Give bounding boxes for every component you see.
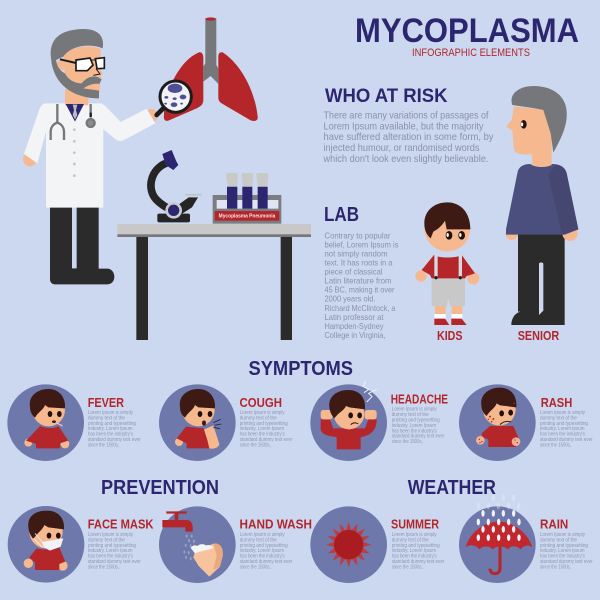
microscope base [157,214,190,222]
table legs [136,237,292,340]
microscope [151,150,202,222]
hair and beard [51,29,103,98]
cough text: industry. Lorem Ipsum [240,426,284,432]
cough heading: COUGH [240,395,282,410]
summer text: dummy text of the [392,537,429,543]
rack label [215,211,279,221]
umbrella canopy [466,522,532,549]
rash text: Lorem Ipsum is simply [540,410,585,416]
doctor [23,29,158,284]
pivot center [168,205,179,216]
hand wash text: standard dummy text ever [240,559,293,565]
panel: face mask [8,506,154,583]
panel: rain [459,494,593,583]
headache hair [329,390,365,418]
fever text: standard dummy text ever [88,437,141,443]
panel: hand wash [159,506,312,583]
rash heading: RASH [541,395,572,410]
text block: lab: Richard McClintock, a [324,303,396,313]
headache eyes [348,412,362,418]
summer text: Lorem Ipsum is simply [392,532,437,538]
fever text: since the 1500s, [88,442,119,448]
panel: summer [310,506,445,583]
text block: lab: Contrary to popular [324,230,391,240]
rash hands [476,436,520,446]
senior sleeve shade [548,165,578,234]
cough lines [213,419,221,429]
text block: lab: 45 BC, making it over [324,285,395,295]
microscope arm [151,163,173,211]
fever circle [7,384,84,461]
senior sweater [506,164,578,235]
text block: lab: Latin professor at [324,312,384,322]
face mask text: industry. Lorem Ipsum [88,548,132,554]
face mask text: printing and typesetting [88,543,136,549]
summer circle [310,506,387,583]
headache text: industry. Lorem Ipsum [392,423,436,429]
senior hands [506,226,578,241]
fever text: has been the industry's [88,432,133,438]
rain text: dummy text of the [540,537,577,543]
senior legs [511,233,565,325]
rash text: standard dummy text ever [540,437,593,443]
fever heading: FEVER [88,395,125,410]
cough text: since the 1500s, [240,442,271,448]
fever text: Lorem Ipsum is simply [88,410,133,416]
kid suspenders [434,255,462,277]
summer text [392,532,445,570]
title: MYCOPLASMA [355,12,579,50]
senior head [506,107,552,167]
hand wash text: since the 1500s, [240,564,271,570]
hand wash text: industry. Lorem Ipsum [240,548,284,554]
headache shirt [321,419,377,449]
text block: lab: Hampden-Sydney [324,321,384,331]
text block: lab: 2000 years old. [324,294,376,304]
headache mouth [351,423,358,425]
fever head [32,394,65,426]
kid head [424,205,470,251]
rash spots [479,403,518,443]
thermometer [53,421,63,426]
text block: who at risk: injected humour, or randomised words [324,143,480,154]
headache hands [321,410,377,419]
rash text: dummy text of the [540,415,577,421]
headache icon [310,381,387,461]
face mask icon [8,506,84,583]
doctor legs [50,207,114,284]
summer text: printing and typesetting [392,543,440,549]
senior figure [506,86,578,325]
headache text [392,407,445,445]
lens [160,81,191,112]
fever eyes [48,411,62,417]
text block: who at risk: Lorem Ipsum available, but the majority [324,121,484,132]
headache text: printing and typesetting [392,418,440,424]
kid shoes [434,319,467,325]
fever text: printing and typesetting [88,421,136,427]
heading: who at risk: WHO AT RISK [325,85,448,107]
rash mouth [500,421,511,425]
text block: who at risk: have suffered alteration in some form, by [324,132,494,143]
heading: lab: LAB [324,204,359,226]
text block: lab: text. It has roots in a [324,258,393,268]
rain circle [459,506,536,583]
right lung [218,52,258,121]
senior eye highlight [521,122,523,126]
face mask heading: FACE MASK [88,517,154,532]
water drops [183,534,195,560]
trachea top [205,17,216,21]
rain text: since the 1500s, [540,564,571,570]
lungs [164,17,258,121]
fever mouth [52,420,56,423]
doctor coat [24,103,155,208]
senior leg gap [539,262,543,315]
text block: lab: Latin literature from [324,276,392,286]
fever hands [24,439,69,448]
headache text: since the 1500s, [392,439,423,445]
rash hair [481,388,516,416]
cough shirt [177,427,210,448]
left lung [164,52,203,121]
rain text [540,532,593,570]
kid eye highlights [446,233,461,237]
hand wash text: dummy text of the [240,537,277,543]
text block: lab [324,230,398,340]
magnifying glass [157,81,191,115]
cough mouth [202,420,206,426]
senior eye [521,120,527,129]
fever icon [7,384,84,461]
cough text: Lorem Ipsum is simply [240,410,285,416]
cough text: printing and typesetting [240,421,288,427]
headache heading: HEADACHE [391,391,448,406]
tube caps [226,173,268,187]
cough text [240,410,293,448]
kid figure [415,202,479,325]
hand wash text: Lorem Ipsum is simply [240,532,285,538]
headache circle [310,384,387,461]
table [117,224,311,340]
washing hands [193,544,223,577]
face mask text [88,532,141,570]
text block: who at risk: There are many variations of passages of [324,111,489,122]
face mask head [29,515,63,548]
rash head [483,393,516,426]
rain text: has been the industry's [540,554,585,560]
rain text: standard dummy text ever [540,559,593,565]
summer heading: SUMMER [391,517,440,532]
microscope pivot [165,202,182,219]
umbrella handle [490,546,500,574]
coat buttons [73,128,76,177]
rash circle [459,384,536,461]
cough text: standard dummy text ever [240,437,293,443]
face mask text: Lorem Ipsum is simply [88,532,133,538]
rain text: industry. Lorem Ipsum [540,548,584,554]
rash text: since the 1500s, [540,442,571,448]
kid legs [435,305,462,315]
stethoscope [51,104,95,140]
cough icon [159,384,236,461]
table top [117,224,311,235]
rash text [540,410,593,448]
raindrops [477,494,521,541]
face mask circle [8,506,84,583]
hand shadow [213,544,223,570]
doctor hands [23,109,158,166]
summer icon [310,506,387,583]
sun rays [326,522,371,567]
hand wash text: has been the industry's [240,554,285,560]
summer text: standard dummy text ever [392,559,445,565]
rash text: has been the industry's [540,432,585,438]
rain text: Lorem Ipsum is simply [540,532,585,538]
rain icon [459,494,536,583]
microscope stage [185,192,202,197]
shirt and tie [66,104,84,122]
fever text: industry. Lorem Ipsum [88,426,132,432]
eyepiece [162,150,178,170]
panel: fever [7,384,141,461]
cough circle [159,384,236,461]
mask straps [33,533,43,547]
heading: prevention: PREVENTION [101,476,219,499]
face mask hands [24,559,68,571]
figures: kid and senior [415,86,578,325]
faucet [162,511,193,532]
text block: lab: belief, Lorem Ipsum is [324,240,398,250]
heading: weather: WEATHER [408,476,496,499]
cough text: has been the industry's [240,432,285,438]
test tube rack [213,173,281,224]
hand wash circle [159,506,236,583]
kid shirt [422,255,475,278]
text block: who at risk: which don't look even slightly believable. [323,154,488,165]
doctor nose [93,62,103,75]
rain heading: RAIN [540,517,568,532]
kid eyes [446,231,465,240]
face mask text: has been the industry's [88,554,133,560]
doctor face [63,46,101,95]
rash eyes [499,410,513,416]
rash text: printing and typesetting [540,421,588,427]
face mask text: since the 1500s, [88,564,119,570]
tie [73,105,77,119]
tubes [227,187,268,209]
cough head [182,394,215,426]
fever shirt [26,426,68,448]
neck [65,89,88,105]
kid hair [424,202,470,238]
heading: symptoms: SYMPTOMS [248,357,353,380]
doctor ear [56,60,66,70]
text block: lab: not simply random [324,249,388,259]
lightning [363,381,377,402]
fever text [88,410,141,448]
senior ear [544,124,553,133]
panel: headache [310,381,448,461]
cough text: dummy text of the [240,415,277,421]
hand wash text [240,532,293,570]
text block: lab: College in Virginia, [324,330,386,340]
rack slots [217,200,278,209]
label: kids: KIDS [437,328,463,343]
mask [42,538,63,551]
text block: lab: piece of classical [324,267,383,277]
cough hand left [175,438,183,446]
rack label text: Mycoplasma Pneumonia [219,214,275,220]
rain text: printing and typesetting [540,543,588,549]
hand wash heading: HAND WASH [240,517,312,532]
cough hair [180,389,215,418]
hand wash text: printing and typesetting [240,543,288,549]
panel: rash [459,384,593,461]
cough arm [204,425,219,449]
cells [164,84,186,107]
face mask shirt [29,548,65,570]
panel: cough [159,384,293,461]
face mask text: standard dummy text ever [88,559,141,565]
summer text: industry. Lorem Ipsum [392,548,436,554]
text block: who at risk [323,111,494,165]
rack frame [213,195,281,224]
summer text: has been the industry's [392,554,437,560]
fever text: dummy text of the [88,415,125,421]
soap foam [191,544,214,553]
face mask eyes [47,533,61,539]
face mask hair [28,511,64,539]
suspender clips [434,276,462,279]
rash text: industry. Lorem Ipsum [540,426,584,432]
handle [157,108,163,115]
microscope lower arm [177,197,198,215]
glasses [60,58,104,75]
kid shorts [432,277,465,306]
headache text: dummy text of the [392,412,429,418]
label: senior: SENIOR [518,328,559,343]
kid hands [415,270,479,284]
face mask text: dummy text of the [88,537,125,543]
hand wash icon [159,506,236,583]
senior hair [512,86,567,153]
sun disc [334,530,363,559]
cough eyes [198,411,212,417]
headache text: standard dummy text ever [392,434,445,440]
headache text: Lorem Ipsum is simply [392,407,437,413]
headache text: has been the industry's [392,428,437,434]
table edge [117,234,311,237]
illustration: doctor, lungs and lab table [23,17,311,340]
subtitle: INFOGRAPHIC ELEMENTS [412,47,530,59]
fever hair [30,389,65,418]
summer text: since the 1500s, [392,564,423,570]
headache head [334,399,364,429]
rash shirt [482,426,518,447]
kid socks [434,314,462,319]
rash icon [459,384,536,461]
trachea [203,18,218,84]
